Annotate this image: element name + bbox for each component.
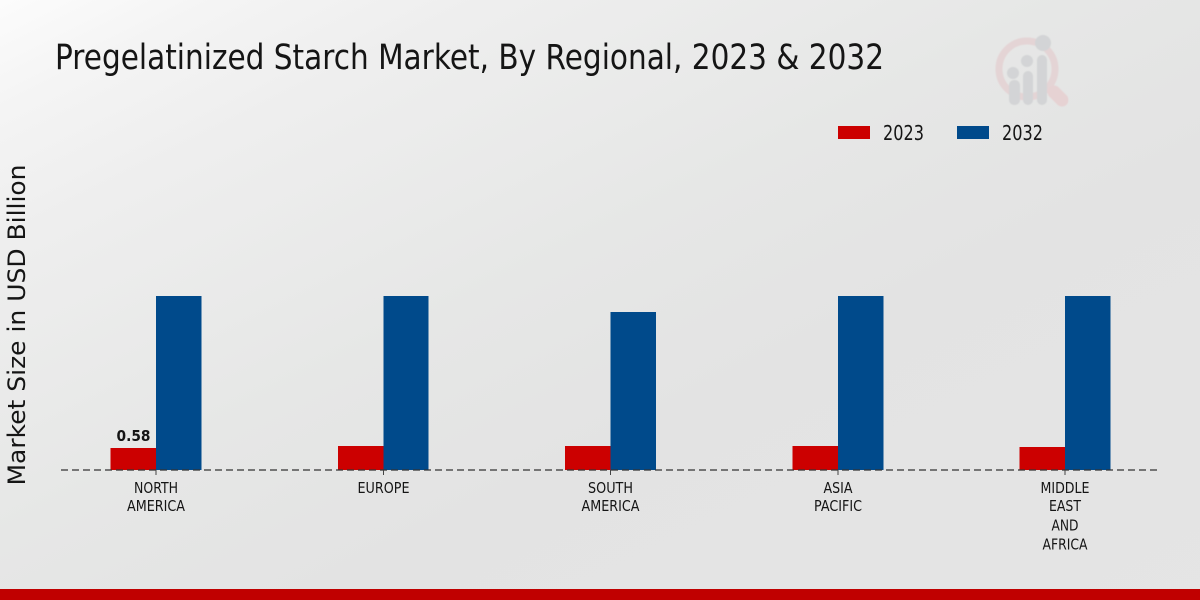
asia pacific bars: [792, 296, 884, 470]
footer bar: [0, 589, 1200, 600]
icon: watermark logo: [999, 35, 1062, 105]
legend item: 2023: [838, 121, 924, 145]
legend item: 2023: 2023: [883, 121, 924, 145]
value label 0.58: 0.58: [116, 427, 150, 445]
x-axis labels: [127, 479, 1090, 554]
label: asia pacific: [814, 479, 862, 515]
label: north america: [127, 479, 185, 515]
bar chart: [61, 296, 1160, 475]
label: middle east and africa: AND: [1052, 516, 1079, 534]
legend item: 2032: 2032: [1002, 121, 1043, 145]
label: south america: AMERICA: [582, 497, 640, 515]
label: middle east and africa: MIDDLE: [1040, 479, 1090, 497]
label: middle east and africa: AFRICA: [1042, 536, 1088, 554]
south america bars: [565, 312, 656, 470]
label: europe: EUROPE: [358, 479, 410, 497]
y-axis title: Market Size in USD Billion: [3, 164, 31, 486]
label: middle east and africa: [1040, 479, 1090, 554]
middle east and africa bars: [1020, 296, 1110, 470]
title: Pregelatinized Starch Market, By Regional, 2023 & 2032: [55, 38, 884, 78]
north america bars: [110, 296, 202, 470]
label: north america: NORTH: [134, 479, 178, 497]
europe bars: [338, 296, 428, 470]
label: asia pacific: ASIA: [824, 479, 853, 497]
label: asia pacific: PACIFIC: [814, 497, 862, 515]
label: middle east and africa: EAST: [1049, 497, 1081, 515]
label: south america: SOUTH: [588, 479, 633, 497]
label: north america: AMERICA: [127, 497, 185, 515]
legend item: 2032: [957, 121, 1043, 145]
legend: [838, 121, 1043, 145]
label: south america: [582, 479, 640, 515]
